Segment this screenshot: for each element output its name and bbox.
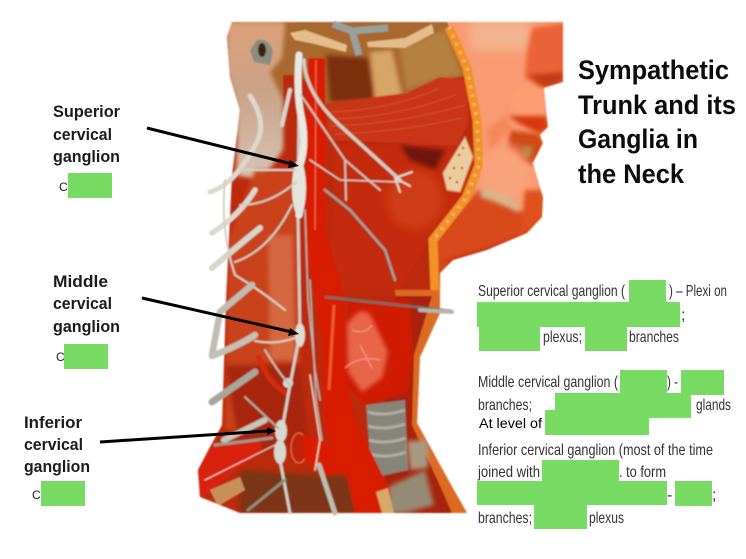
tan upper right tissue [400,30,462,90]
text block: inferior cervical ganglion: plexus [589,510,624,527]
text block: superior cervical ganglion: plexus; [543,329,582,346]
middle level answer box: C [56,350,65,364]
chin [481,145,529,205]
anatomical illustration: neck dissection [190,20,570,520]
cheek edge [487,115,512,150]
text block: middle cervical ganglion: At level of [479,416,542,431]
label: inferior cervical ganglion: cervical [24,436,83,454]
thyroid texture [345,325,380,368]
label: middle cervical ganglion: ganglion [53,318,120,336]
nose [525,22,570,90]
clavicle stub [210,477,245,506]
thyroid red lobe [345,300,413,405]
thyroid pink lobe [347,311,388,392]
text block: middle cervical ganglion: branches; [478,397,532,414]
label: inferior cervical ganglion: ganglion [24,458,90,476]
round masseter [387,170,443,230]
text block: inferior cervical ganglion: . to form [619,464,666,481]
vessel ring [291,433,307,463]
text block: superior cervical ganglion: ; [681,307,685,324]
title: Ganglia in [578,124,698,154]
label: inferior cervical ganglion: Inferior [24,414,83,432]
spinal nerve roots [205,96,296,510]
vertebral artery branch [258,355,290,395]
forehead pale top [470,20,530,50]
tan clavicle stub right [376,488,394,513]
dark shadow behind jaw [400,145,445,170]
upper lip light [538,86,544,92]
text block: superior cervical ganglion: branches [629,329,679,346]
text block: inferior cervical ganglion: - [667,487,672,504]
inferior cervical ganglion [274,420,287,464]
superior level answer box: C [59,180,68,194]
text block: superior cervical ganglion [477,280,727,351]
mouth [508,116,550,134]
arrow to middle ganglion [142,298,299,336]
lower left dark tissue [225,365,310,450]
arrow to superior ganglion [147,128,299,168]
bottom brown tissue [240,470,372,513]
small ganglion node [283,378,293,388]
muscle striations [330,88,465,134]
text block: inferior cervical ganglion: branches; [478,510,532,527]
gray cartilage lower right [407,440,428,470]
sympathetic trunk with branches [280,55,452,513]
label: inferior cervical ganglion [24,414,90,476]
superior cervical ganglion [292,160,306,216]
text block: inferior cervical ganglion: ; [712,487,716,504]
label: superior cervical ganglion: Superior [53,103,121,121]
arrow to inferior ganglion [100,427,276,442]
text block: inferior cervical ganglion [477,442,716,529]
carotid artery [305,58,392,513]
label: superior cervical ganglion: cervical [53,126,112,144]
text block: inferior cervical ganglion: joined with [477,464,540,481]
text block: middle cervical ganglion [478,370,731,435]
parotid orange strip [433,27,479,290]
bone oval [443,137,473,192]
chin pale band [480,188,522,212]
gray vertebra ring [250,40,273,65]
label: superior cervical ganglion: ganglion [53,148,120,166]
pale tissue upper left [227,22,285,180]
inferior level answer box: C [32,488,41,502]
title [578,55,736,189]
bone strips [290,30,347,52]
superior level answer box [59,173,112,198]
text block: superior cervical ganglion: Superior cervical ganglion ( [478,283,626,300]
lower lip shadow [508,130,545,165]
pale bone column [370,50,402,102]
label: middle cervical ganglion: Middle [53,273,108,291]
text block: middle cervical ganglion: Middle cervical ganglion ( [478,374,619,391]
text block: middle cervical ganglion: glands [696,397,731,414]
title: the Neck [578,159,685,189]
trachea rings [368,410,406,456]
text block: middle cervical ganglion: ) - [667,374,678,391]
neck base muscle [190,20,480,520]
dark pocket upper middle [326,55,375,102]
middle cervical ganglion [295,323,305,347]
title: Trunk and its [578,90,736,120]
lateral muscle lighter band [268,235,296,360]
label: middle cervical ganglion [53,273,120,336]
front neck tissue [395,290,467,513]
label: middle cervical ganglion: cervical [53,295,112,313]
trachea [366,400,408,478]
lateral neck muscle [225,170,300,430]
middle level answer box [56,344,108,369]
muscle upper centre [327,77,468,147]
lower jaw muscle mass [330,145,470,290]
inferior level answer box [32,481,85,506]
gray top nerve [333,24,388,55]
upper skull base tissue [227,22,470,145]
label: superior cervical ganglion [53,103,121,166]
nostril [528,72,563,88]
face skin [438,21,564,273]
title: Sympathetic [578,55,729,85]
jaw lower red [436,188,544,274]
subclavian artery [195,440,262,497]
